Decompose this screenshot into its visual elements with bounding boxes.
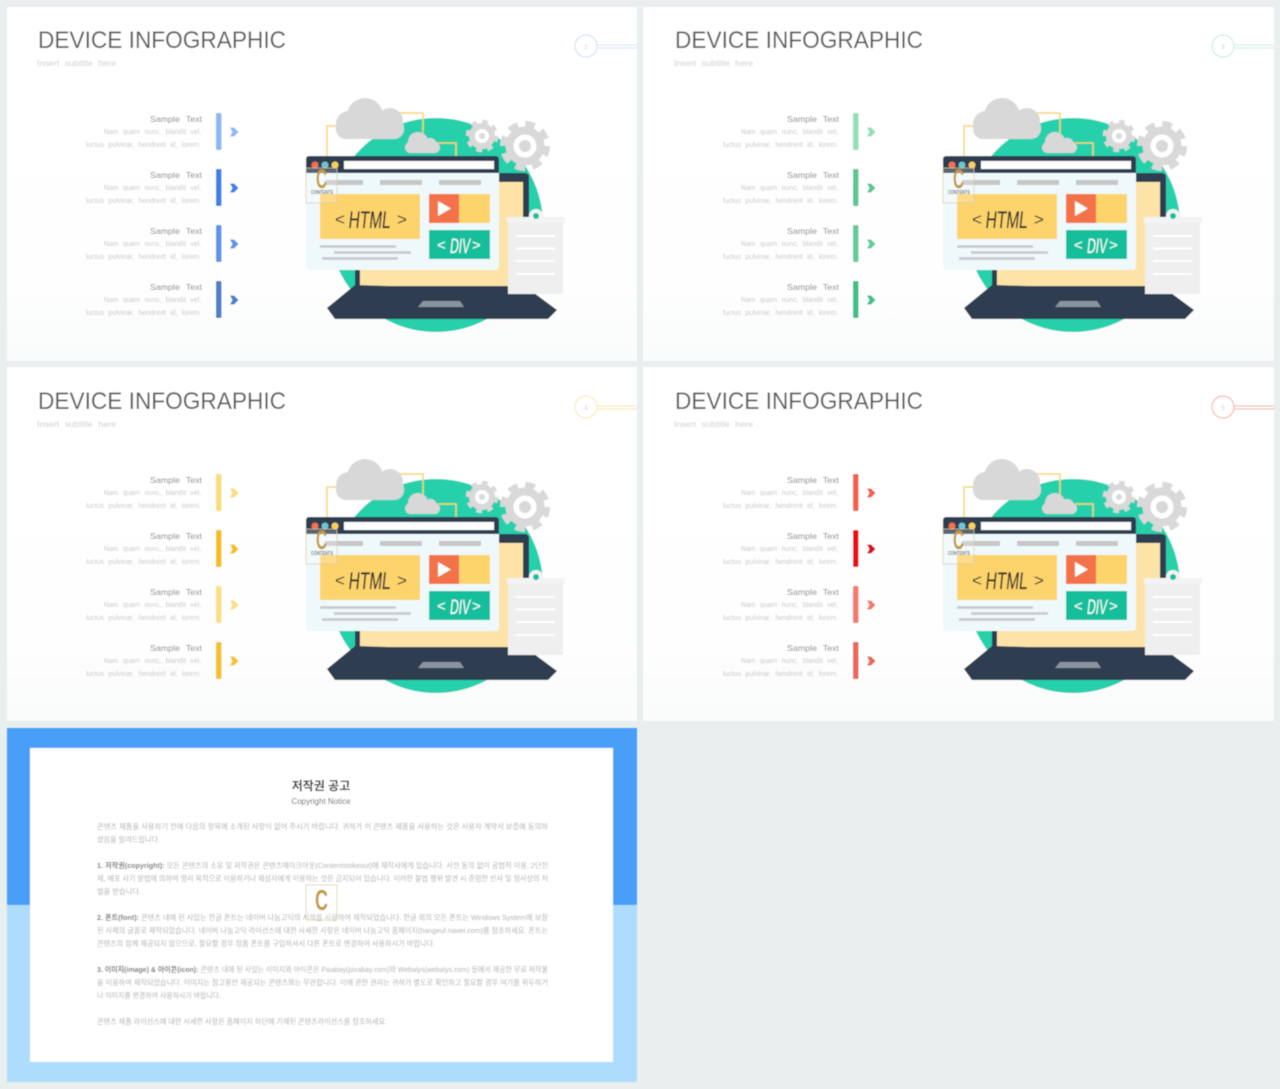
icon: small gear [1105,122,1133,150]
connector lines [964,113,1093,157]
list item 2: Nam quam nunc, blandit vel, [741,185,838,192]
icon: large gear [504,486,546,528]
page number badge: 2 [584,45,588,51]
list item 2: luctus pulvinar, hendrerit id, lorem. [86,198,201,205]
page number badge: 4 [584,406,588,412]
notice heading: 저작권 공고 [292,778,350,793]
page number badge: 5 [1221,406,1225,412]
blue backdrop top [7,728,637,905]
list item 2: Sample Text [787,531,840,541]
browser window [306,156,499,270]
list item 2 [86,530,238,567]
intro paragraph: 셨음을 알려드립니다. [97,834,160,844]
list item 1: Sample Text [150,114,203,124]
illustration: web browser on laptop [943,98,1202,332]
list item 3 [86,586,238,623]
DIV block: DIV [1086,235,1108,258]
panel: red slide [643,367,1274,721]
list item 2: Nam quam nunc, blandit vel, [741,546,838,553]
list item 2: Sample Text [787,170,840,180]
section 3: image and icon: 나 이미지를 변경하여 사용하시기 바랍니다. [97,990,221,1000]
list item 3: Sample Text [150,226,203,236]
list item 3: Nam quam nunc, blandit vel, [741,602,838,609]
illustration: web browser on laptop [306,459,565,693]
list item 3: Nam quam nunc, blandit vel, [104,602,201,609]
illustration: web browser on laptop [943,459,1202,693]
list item 1: Sample Text [150,475,203,485]
laptop base [327,285,557,319]
subtitle: Insert subtitle here [674,58,753,68]
list item 3: luctus pulvinar, hendrerit id, lorem. [86,254,201,261]
watermark logo [943,525,974,564]
HTML block: HTML [347,207,392,234]
notepad [507,209,565,294]
page number badge [575,35,637,57]
HTML block [320,194,420,239]
icon: large cloud [336,459,404,500]
list item 4: Sample Text [787,643,840,653]
DIV block [429,591,490,620]
list item 3: Sample Text [787,226,840,236]
DIV block: > [472,598,481,615]
list item 3: luctus pulvinar, hendrerit id, lorem. [723,254,838,261]
list item 2: Nam quam nunc, blandit vel, [104,546,201,553]
title: DEVICE INFOGRAPHIC [675,388,923,415]
watermark logo: C [315,885,328,917]
HTML block: > [1034,210,1044,229]
laptop screen [992,534,1166,652]
green circle [966,479,1180,693]
HTML block: > [1034,571,1044,590]
watermark logo: C [953,525,964,555]
list item 4: Sample Text [150,282,203,292]
DIV block: > [1109,237,1118,254]
list item 2: luctus pulvinar, hendrerit id, lorem. [86,559,201,566]
section 2: font: 콘텐츠의 함께 제공되지 않으므로, 필요할 경우 정품 폰트를 구입하셔서 다른 폰트로 변경하여 사용하시기 바랍니다. [97,938,435,948]
list item 1: Nam quam nunc, blandit vel, [741,129,838,136]
icon: large gear [1140,486,1184,528]
HTML block: HTML [984,568,1029,595]
watermark logo: C [316,164,327,194]
browser window [943,517,1136,631]
list item 2: luctus pulvinar, hendrerit id, lorem. [723,559,838,566]
list item 1: luctus pulvinar, hendrerit id, lorem. [723,142,838,149]
intro paragraph [97,821,548,844]
list item 1: luctus pulvinar, hendrerit id, lorem. [86,503,201,510]
intro paragraph: 콘텐츠 제품을 사용하기 전에 다음의 항목에 소개된 사항이 없어 주시기 바랍니다. 귀하가 이 콘텐츠 제품을 사용하는 것은 사용자 계약서 보증에 동의하 [97,821,548,831]
list item 1: Nam quam nunc, blandit vel, [104,129,201,136]
list item 1: luctus pulvinar, hendrerit id, lorem. [86,142,201,149]
icon: small cloud [1042,493,1077,514]
icon: large cloud [336,98,404,139]
DIV block: DIV [1086,596,1108,619]
notepad [1144,209,1202,294]
list item 2: Sample Text [150,170,203,180]
section 3: image and icon: 3. 이미지(image) & 아이콘(icon): 콘텐츠 내에 된 사있는 이미지와 아이콘은 Pixabay(pixabay.com)와 Webalys(webalys.com) 등에서 제공한 무료 저작물 [97,964,548,974]
list item 3: luctus pulvinar, hendrerit id, lorem. [723,615,838,622]
list item 1 [723,474,876,511]
list item 4: luctus pulvinar, hendrerit id, lorem. [723,671,838,678]
notepad [1144,570,1202,655]
list item 4 [86,281,238,318]
panel: green slide [643,7,1274,361]
notice subheading: Copyright Notice [291,797,351,806]
list item 4 [723,281,876,318]
list item 2: luctus pulvinar, hendrerit id, lorem. [723,198,838,205]
HTML block: < [972,210,982,229]
panel background [643,367,1274,721]
watermark logo [943,164,974,203]
panel background [7,7,637,361]
list item 1 [723,113,876,150]
notepad [507,570,565,655]
list item 4 [86,642,238,679]
watermark logo [306,885,337,920]
list item 1: Sample Text [787,114,840,124]
section 2: font: 된 사체의 글꼴로 제작되었습니다. 네이버 나눔고딕 라이선스에 대한 사세한 사항은 네이버 나눔고딕 홈페이지(hangeul.naver.com)를 참조하세요. 폰트는 [97,925,548,935]
watermark logo: C [953,164,964,194]
blue backdrop bottom [7,905,637,1082]
icon: large cloud [973,98,1041,139]
DIV block: < [1074,598,1083,615]
list item 3 [723,225,876,262]
list item 4: Nam quam nunc, blandit vel, [104,297,201,304]
icon: large gear [1140,124,1184,168]
section 1: copyright: 1. 저작권(copyright): 모든 콘텐츠의 소유 및 저작권은 콘텐츠메이크아웃(Contentstokeout)에 제작사에게 있습니다. 사전 동의 없이 공범적 이용, 2단전 [97,860,548,870]
watermark logo: CONTENTS [311,551,334,557]
panel background [7,367,637,721]
watermark logo: CONTENTS [948,551,971,557]
green circle [329,118,543,332]
section 2: font: 2. 폰트(font): 콘텐츠 내에 된 사있는 한글 폰트는 네이버 나눔고딕의 서체를 사용하여 제작되었습니다. 한글 외의 모든 폰트는 Windows System에 보장 [97,912,548,922]
panel: yellow slide [7,367,637,721]
list item 2: Nam quam nunc, blandit vel, [104,185,201,192]
HTML block: < [335,210,345,229]
section 3: image and icon [97,964,548,1000]
browser window [943,156,1136,270]
connector lines [327,474,456,518]
list item 4: luctus pulvinar, hendrerit id, lorem. [723,310,838,317]
list item 3: Nam quam nunc, blandit vel, [104,241,201,248]
video player block [429,194,490,223]
list item 2 [86,169,238,206]
section 1: copyright [97,860,548,896]
DIV block: < [437,598,446,615]
panel: copyright notice [7,728,637,1082]
laptop base [964,646,1194,680]
title: DEVICE INFOGRAPHIC [38,388,286,415]
list item 2: Sample Text [150,531,203,541]
HTML block: < [335,571,345,590]
page number badge [1212,396,1274,418]
icon: large cloud [973,459,1041,500]
HTML block: HTML [347,568,392,595]
list item 3 [723,586,876,623]
list item 3: Sample Text [787,587,840,597]
illustration: web browser on laptop [306,98,565,332]
HTML block [320,555,420,600]
page number badge [575,396,637,418]
video player block [1066,555,1127,584]
DIV block: DIV [449,596,471,619]
icon: small gear [468,483,496,511]
section 3: image and icon: 을 이용하여 제작되었습니다. 이미지는 참고용만 제공되는 콘텐츠와는 무관합니다. 이에 관한 권리는 귀하가 별도로 확인하고 필요할 경우 여기를 위두하거 [97,977,548,987]
DIV block: DIV [449,235,471,258]
laptop base [964,285,1194,319]
DIV block: > [1109,598,1118,615]
icon: large gear [504,124,546,168]
white notice card [30,748,613,1062]
watermark logo: CONTENTS [311,190,334,196]
section 2: font [97,912,548,948]
list item 3: Nam quam nunc, blandit vel, [741,241,838,248]
subtitle: Insert subtitle here [674,419,753,429]
icon: small gear [468,122,496,150]
list item 1: luctus pulvinar, hendrerit id, lorem. [723,503,838,510]
icon: small cloud [1042,132,1077,153]
list item 3 [86,225,238,262]
green circle [966,118,1180,332]
DIV block: > [472,237,481,254]
HTML block [957,555,1057,600]
list item 2 [723,169,876,206]
laptop screen [992,173,1166,291]
panel background [643,7,1274,361]
connector lines [964,474,1093,518]
laptop base [327,646,557,680]
HTML block [957,194,1057,239]
DIV block: < [437,237,446,254]
DIV block [1066,591,1127,620]
DIV block [429,230,490,259]
list item 1: Sample Text [787,475,840,485]
title: DEVICE INFOGRAPHIC [675,27,923,54]
connector lines [327,113,456,157]
HTML block: > [397,571,407,590]
list item 1 [86,474,238,511]
list item 4: luctus pulvinar, hendrerit id, lorem. [86,310,201,317]
HTML block: < [972,571,982,590]
video player block [429,555,490,584]
watermark logo: CONTENTS [948,190,971,196]
laptop screen [355,534,529,652]
green circle [329,479,543,693]
list item 2 [723,530,876,567]
laptop screen [355,173,529,291]
list item 4: Sample Text [150,643,203,653]
section 1: copyright: 제, 배포 사기 방법에 의하여 영리 목적으로 이용하거나 제삼자에게 이용하는 것은 금지되어 있습니다. 이러한 불법 행위 발견 시 준엄한 민사 및 형사상의 처 [97,873,548,883]
video player block [1066,194,1127,223]
list item 1: Nam quam nunc, blandit vel, [741,490,838,497]
title: DEVICE INFOGRAPHIC [38,27,286,54]
list item 4: luctus pulvinar, hendrerit id, lorem. [86,671,201,678]
list item 1 [86,113,238,150]
list item 3: Sample Text [150,587,203,597]
watermark logo [306,525,337,564]
HTML block: HTML [984,207,1029,234]
watermark logo: C [316,525,327,555]
DIV block [1066,230,1127,259]
DIV block: < [1074,237,1083,254]
list item 4: Sample Text [787,282,840,292]
list item 1: Nam quam nunc, blandit vel, [104,490,201,497]
watermark logo [306,164,337,203]
icon: small gear [1105,483,1133,511]
subtitle: Insert subtitle here [37,58,116,68]
HTML block: > [397,210,407,229]
subtitle: Insert subtitle here [37,419,116,429]
page number badge: 3 [1221,45,1225,51]
browser window [306,517,499,631]
section 1: copyright: 벌을 받습니다. [97,886,141,896]
list item 4 [723,642,876,679]
icon: small cloud [405,493,440,514]
icon: small cloud [405,132,440,153]
page number badge [1212,35,1274,57]
list item 4: Nam quam nunc, blandit vel, [741,297,838,304]
license note: 콘텐츠 제품 라이선스에 대한 사세한 사항은 홈페이지 하단에 기재된 콘텐츠라이선스를 참조하세요. [97,1016,387,1026]
panel: blue slide [7,7,637,361]
list item 4: Nam quam nunc, blandit vel, [741,658,838,665]
list item 4: Nam quam nunc, blandit vel, [104,658,201,665]
list item 3: luctus pulvinar, hendrerit id, lorem. [86,615,201,622]
